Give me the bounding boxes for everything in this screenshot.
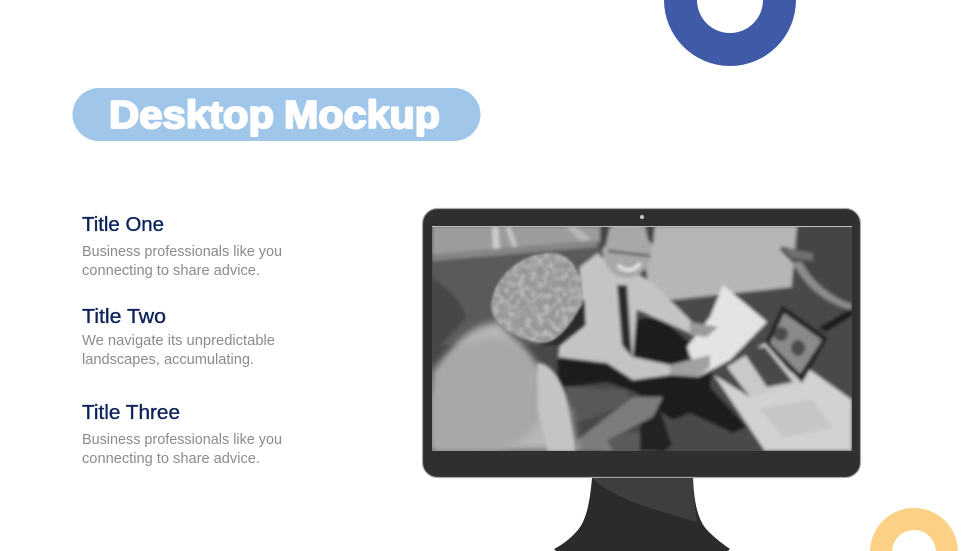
- spreadsheet on table: [763, 402, 829, 436]
- wall behind sofa: [432, 227, 602, 256]
- desktop monitor: [422, 208, 860, 551]
- woman's collar and hand: [537, 363, 575, 451]
- title: Desktop: [109, 94, 274, 137]
- man's shirt: [558, 253, 693, 380]
- man's head: [602, 220, 652, 278]
- white table: [714, 365, 852, 451]
- text block: title three: Title Three: [82, 402, 180, 424]
- document: [687, 285, 767, 377]
- laptop screen: [765, 305, 828, 383]
- tie: [617, 285, 632, 357]
- text block: title two: landscapes, accumulating.: [82, 351, 254, 368]
- text block: title three: Business professionals like you: [82, 431, 282, 448]
- woman's white top: [432, 322, 578, 451]
- text block: title one: [82, 214, 282, 279]
- text block: title one: Title One: [82, 214, 164, 236]
- text block: title one: Business professionals like you: [82, 243, 282, 260]
- decorative ring: top blue: [664, 0, 796, 66]
- text block: title three: connecting to share advice.: [82, 450, 260, 467]
- webcam: [640, 215, 644, 219]
- hands: [690, 322, 718, 337]
- monitor body: [422, 208, 860, 478]
- woman's sleeve: [560, 387, 630, 423]
- title: Mockup: [284, 94, 440, 137]
- foreground blurred hair: [432, 337, 543, 451]
- text block: title one: connecting to share advice.: [82, 262, 260, 279]
- chair: [779, 227, 798, 264]
- laptop base: [727, 343, 800, 397]
- photo on screen: [432, 220, 852, 462]
- monitor stand: [554, 478, 730, 551]
- sofa: [432, 242, 600, 345]
- text block: title three: [82, 402, 282, 467]
- text block: title two: Title Two: [82, 306, 166, 328]
- knee and lower leg: [606, 432, 657, 451]
- decorative ring: bottom yellow: [870, 508, 958, 551]
- grey-haired woman's face shadow: [540, 300, 585, 345]
- dark carpet: [600, 282, 852, 451]
- grey-haired woman's hair: [491, 253, 583, 343]
- text block: title two: We navigate its unpredictable: [82, 332, 275, 349]
- light carpet: [640, 226, 797, 300]
- text block: title two: [82, 306, 275, 368]
- woman's arm: [575, 397, 663, 451]
- man's trousers: [558, 317, 747, 433]
- screen top highlight: [432, 226, 852, 227]
- title: [72, 88, 480, 141]
